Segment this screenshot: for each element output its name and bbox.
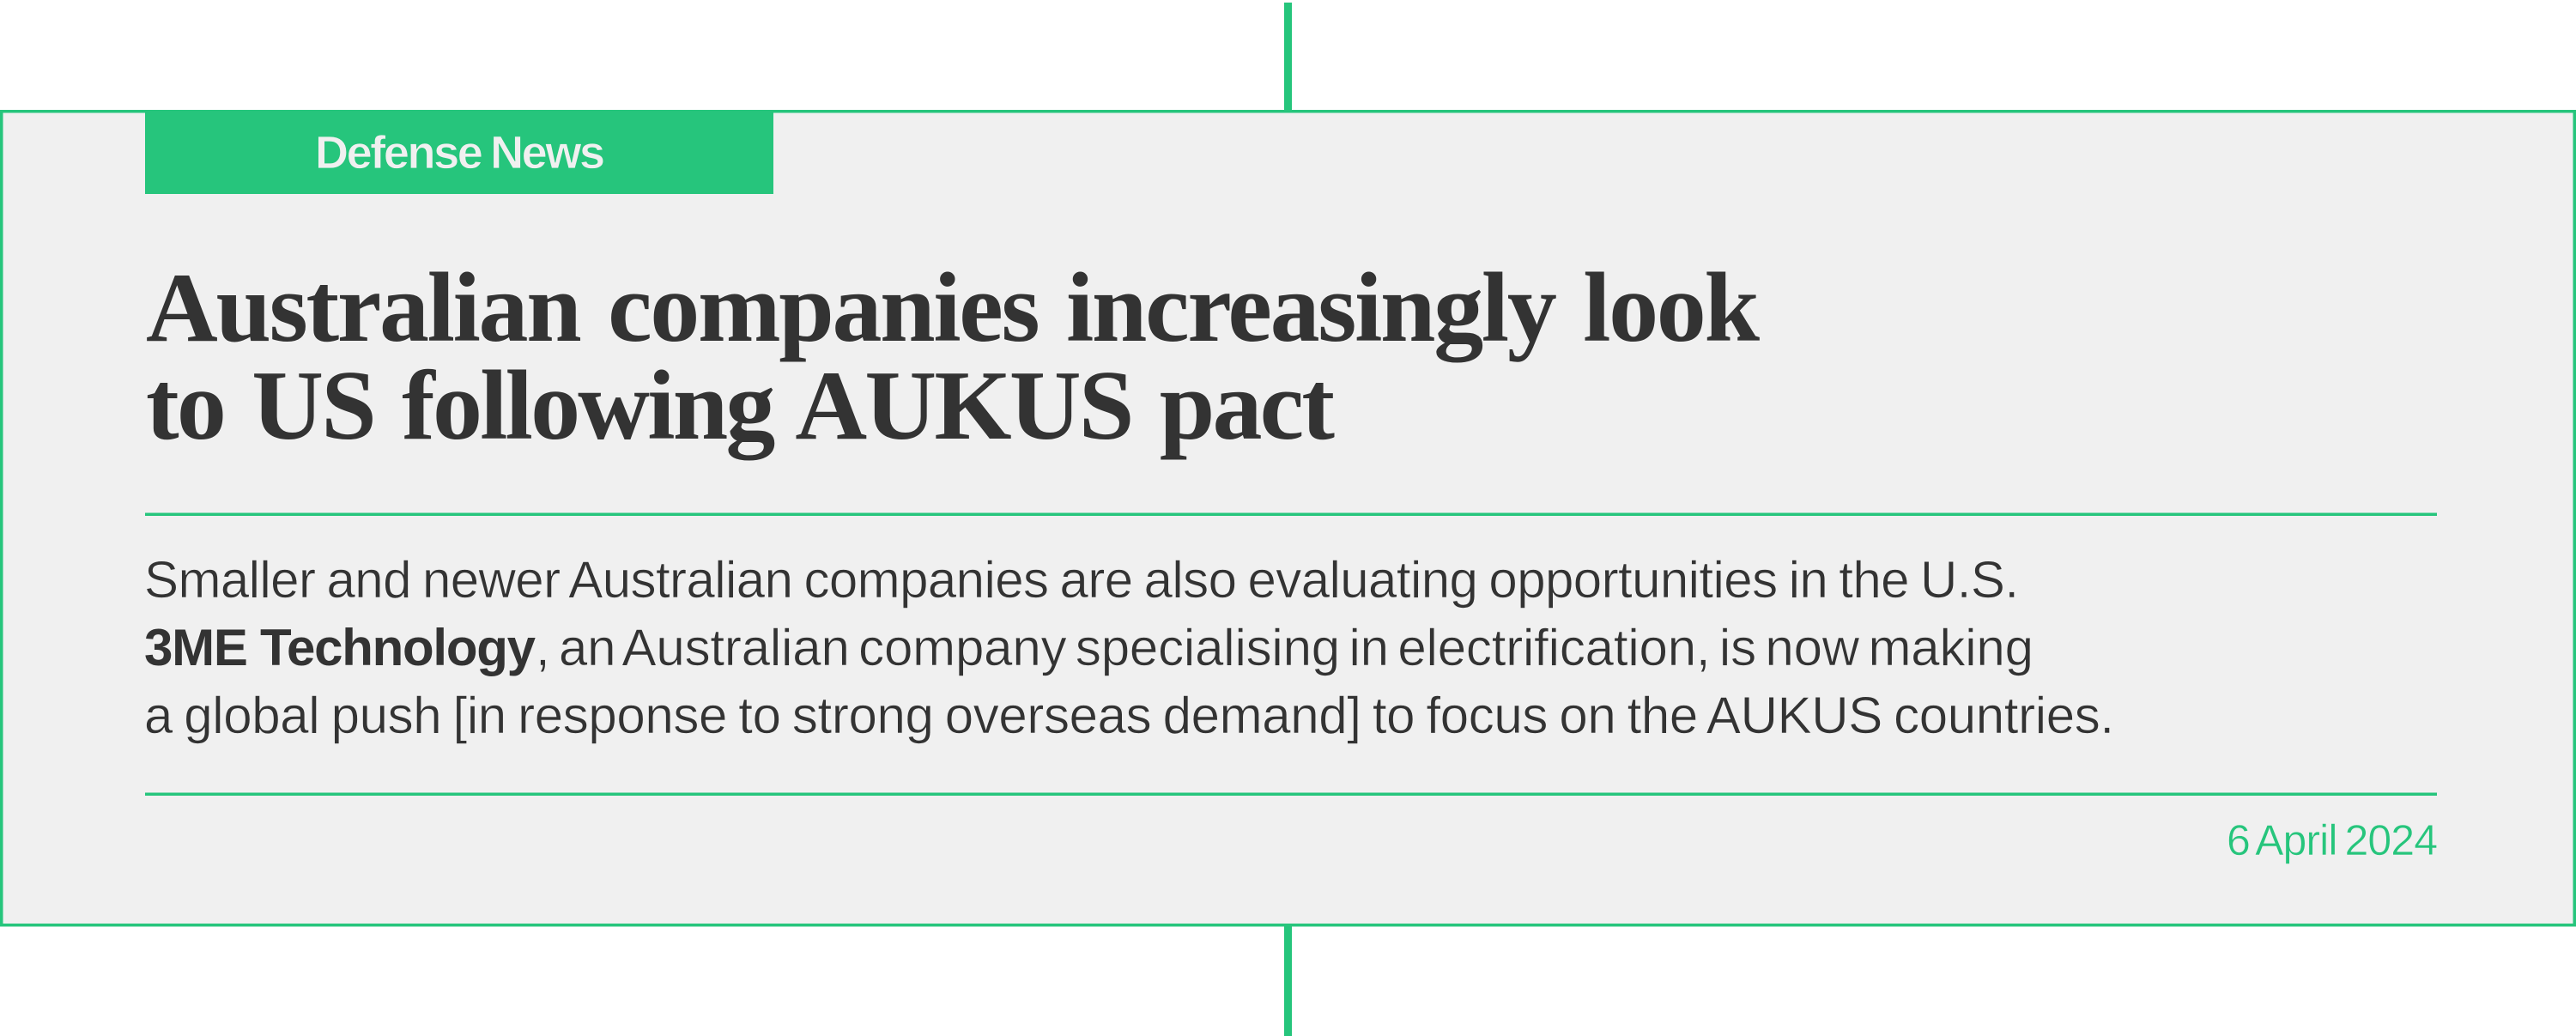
- date: 6 April 2024: [2227, 816, 2438, 864]
- connector line: bottom: [1284, 925, 1292, 1036]
- headline: Australian companies increasingly look: [146, 253, 1760, 363]
- body paragraph: a global push [in response to strong overseas demand] to focus on the AUKUS countries.: [144, 687, 2114, 744]
- source tag: [145, 110, 773, 194]
- body paragraph: 3ME Technology: [144, 619, 536, 676]
- headline: [146, 253, 1760, 461]
- headline: to US following AUKUS pact: [146, 351, 1335, 461]
- panel background and border: [2, 112, 2574, 925]
- body paragraph: [144, 551, 2114, 744]
- body paragraph: Smaller and newer Australian companies are also evaluating opportunities in the U.S.: [144, 551, 2019, 609]
- body paragraph: , an Australian company specialising in electrification, is now making: [536, 619, 2034, 676]
- connector line: top: [1284, 3, 1292, 111]
- panel: news card: [2, 110, 2574, 925]
- source tag: Defense News: [315, 127, 605, 179]
